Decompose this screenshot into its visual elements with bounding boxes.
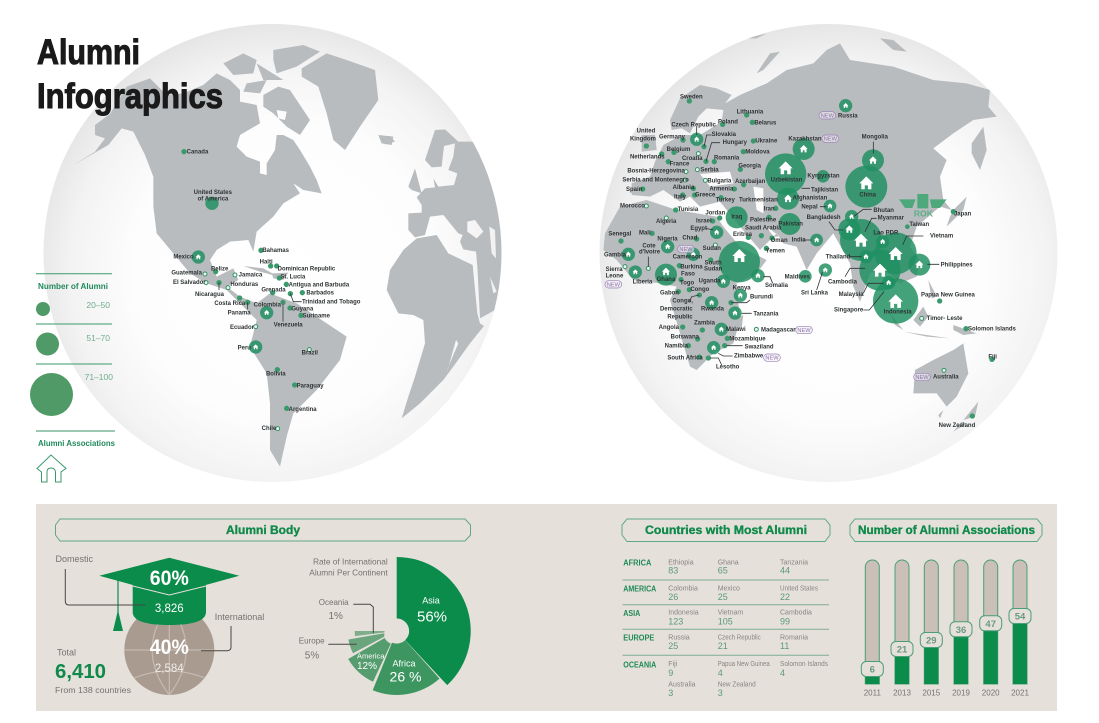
country labels: eurasia, africa, oceania: Zambia [694, 320, 716, 326]
label: International: International [215, 612, 264, 622]
country labels: eurasia, africa, oceania: Croatia [682, 156, 703, 162]
heading: Countries with Most Alumni [622, 519, 830, 542]
country labels: eurasia, africa, oceania: Maldives [785, 274, 811, 280]
bar: 2020: 47 [985, 619, 996, 630]
country labels: eurasia, africa, oceania: Tanzania [753, 311, 779, 317]
country labels: eurasia, africa, oceania: United [637, 129, 656, 135]
NEW badges: NEW [607, 282, 621, 288]
country labels: eurasia, africa, oceania: Greece [695, 193, 716, 199]
country labels: eurasia, africa, oceania: Senegal [608, 231, 632, 237]
legend: number of alumni and associations: 20–50 [86, 300, 110, 310]
label: International [201, 612, 264, 651]
row: Europe: 21 [718, 641, 728, 651]
country labels: americas: Brazil [302, 350, 318, 356]
row: Europe: Russia [668, 634, 690, 641]
country labels: americas: Argentina [289, 407, 317, 413]
row: Africa [623, 559, 808, 576]
NEW badges: NEW [821, 113, 835, 119]
row: America [623, 584, 818, 602]
bar: 2020: 2020 [982, 688, 1000, 697]
chart: number of alumni associations by year [861, 560, 1031, 697]
row: Oceania: OCEANIA [623, 660, 656, 669]
chart: graduation cap and globe: 60% [150, 567, 189, 590]
country labels: eurasia, africa, oceania: Israel [696, 218, 712, 224]
country labels: eurasia, africa, oceania: Australia [933, 375, 959, 381]
country labels: eurasia, africa, oceania: d'Ivoire [639, 249, 661, 255]
country labels: eurasia, africa, oceania: Egypt [690, 226, 707, 232]
country labels: americas: Colombia [254, 303, 282, 309]
country labels: eurasia, africa, oceania: Italy [674, 194, 687, 200]
bar: 2019 [950, 560, 972, 697]
country labels: eurasia, africa, oceania: Belarus [754, 120, 777, 126]
country labels: americas: Venezuela [274, 322, 303, 328]
country labels: eurasia, africa, oceania: Lithuania [737, 110, 764, 116]
legend: number of alumni and associations: 51–70 [86, 333, 110, 343]
country labels: eurasia, africa, oceania: Congo [690, 287, 710, 293]
bar: 2019: 36 [956, 625, 966, 636]
country labels: eurasia, africa, oceania: Romania [714, 156, 740, 162]
NEW badges: NEW [765, 356, 779, 362]
row: Africa: 44 [780, 566, 790, 576]
country labels: eurasia, africa, oceania: Kyrgyzstan [807, 174, 840, 180]
row: Asia: 123 [668, 617, 683, 627]
bar: 2011: 6 [870, 664, 875, 676]
country labels: eurasia, africa, oceania: Fiji [988, 354, 997, 360]
heading: Number of Alumni Associations [850, 519, 1042, 542]
bar: 2021 [1009, 560, 1031, 697]
bar: 2015: 2015 [922, 688, 941, 697]
NEW badges: NEW [915, 375, 929, 381]
row: Asia [623, 609, 812, 627]
country labels: eurasia, africa, oceania: Ghana [657, 277, 676, 283]
country labels: eurasia, africa, oceania: Serbia and Montenegro [622, 178, 689, 184]
row: Oceania: 3 [718, 688, 723, 698]
row: Oceania: 4 [780, 668, 785, 678]
chart: graduation cap and globe: 40% [150, 636, 189, 659]
row: Africa: Tanzania [780, 560, 808, 566]
country labels: eurasia, africa, oceania: Armenia [709, 187, 734, 193]
country labels: eurasia, africa, oceania: Myanmar [878, 216, 905, 222]
country labels: eurasia, africa, oceania: Kenya [733, 286, 751, 292]
country labels: eurasia, africa, oceania: Swaziland [745, 345, 774, 351]
row: Asia: Vietnam [718, 610, 743, 617]
country labels: eurasia, africa, oceania: Moldova [745, 149, 770, 155]
hollow association markers [623, 152, 946, 372]
NEW badges: NEW [797, 328, 811, 334]
chart: graduation cap and globe: 2,584 [155, 663, 184, 675]
country labels: eurasia, africa, oceania: Lesotho [716, 365, 740, 371]
title: Infographics [37, 76, 223, 116]
row: Europe: 11 [780, 641, 789, 651]
country labels: eurasia, africa, oceania: Poland [718, 119, 738, 125]
row: Europe: EUROPE [623, 634, 655, 643]
country labels: eurasia, africa, oceania: Ukraine [755, 138, 778, 144]
chart: rate of international alumni per continent: 12% [357, 661, 377, 672]
country labels: eurasia, africa, oceania: Uganda [699, 279, 721, 285]
country labels: americas: Canada [187, 149, 209, 155]
country labels: eurasia, africa, oceania: Netherlands [630, 155, 665, 161]
country labels: eurasia, africa, oceania: China [859, 193, 877, 199]
bar: 2021: 54 [1015, 612, 1026, 622]
chart: rate of international alumni per continent: 5% [305, 650, 319, 661]
country labels: eurasia, africa, oceania: Gabon [660, 290, 679, 296]
country labels: eurasia, africa, oceania: Rwanda [701, 306, 725, 312]
chart: rate of international alumni per continent: Europe [299, 637, 325, 646]
country labels: eurasia, africa, oceania: Liberia [633, 279, 653, 285]
logo: ROK: ROK [914, 208, 934, 218]
country labels: americas: Dominican Republic [278, 267, 336, 273]
country labels: eurasia, africa, oceania: Japan [954, 211, 972, 217]
country labels: eurasia, africa, oceania: Turkey [716, 198, 736, 204]
country labels: eurasia, africa, oceania: Burkina [680, 265, 703, 271]
total alumni: From 138 countries [55, 685, 131, 695]
bar: 2011: 2011 [864, 688, 881, 697]
country labels: eurasia, africa, oceania: Cote [642, 243, 656, 249]
chart: rate of international alumni per continent: Asia [422, 596, 440, 606]
chart: rate of international alumni per continent: America [357, 651, 385, 660]
country labels: eurasia, africa, oceania: Cameroon [673, 254, 703, 260]
country labels: americas: Panama [228, 310, 251, 316]
country labels: eurasia, africa, oceania: Serbia [700, 168, 719, 174]
bar: 2019: 2019 [952, 688, 970, 697]
row: Oceania: New Zealand [718, 682, 756, 689]
land masses: eurasia, africa, australia [603, 33, 997, 432]
country labels: americas: Grenada [261, 288, 286, 294]
row: Asia: 105 [718, 617, 733, 627]
country labels: americas [171, 149, 361, 432]
label: Domestic [56, 554, 145, 605]
country labels: americas: Honduras [230, 282, 259, 288]
country labels: eurasia, africa, oceania: Angola [659, 325, 680, 331]
row: Africa: AFRICA [623, 559, 652, 568]
row: Europe: Czech Republic [718, 634, 761, 641]
title: Alumni [37, 32, 140, 72]
country labels: eurasia, africa, oceania: Kingdom [630, 137, 656, 143]
row: Asia: 99 [780, 617, 790, 627]
row: Africa: Ghana [718, 560, 739, 566]
country labels: americas: Haiti [260, 259, 273, 265]
country labels: americas: Trinidad and Tobago [302, 300, 361, 306]
legend: number of alumni and associations: Alumni Associations [38, 439, 115, 448]
country labels: eurasia, africa, oceania: Malawi [726, 327, 746, 333]
country labels: eurasia, africa, oceania: Sierra [606, 267, 623, 273]
country labels: eurasia, africa, oceania: South Africa [667, 356, 703, 362]
house icons [626, 103, 923, 350]
country labels: americas: St. Lucia [280, 274, 306, 280]
legend: number of alumni and associations: 71–100 [85, 372, 113, 382]
country labels: americas: Nicaragua [195, 292, 225, 298]
country labels: eurasia, africa, oceania: Nigeria [657, 237, 678, 243]
chart: rate of international alumni per continent: 26 % [390, 669, 421, 685]
chart: rate of international alumni per continent: 1% [328, 611, 343, 622]
bar: 2021: 2021 [1011, 688, 1029, 697]
country labels: eurasia, africa, oceania: Eritrea [733, 232, 753, 238]
chart: rate of international alumni per continent: 56% [417, 609, 447, 626]
country labels: eurasia, africa, oceania: Botswana [671, 334, 700, 340]
country labels: eurasia, africa, oceania: Burundi [750, 295, 773, 301]
country labels: americas: Belize [211, 266, 229, 272]
row: America: Colombia [668, 585, 698, 592]
country labels: eurasia, africa, oceania: Sudan [703, 246, 721, 252]
chart: graduation cap and globe: 3,826 [155, 603, 184, 615]
country labels: eurasia, africa, oceania: France [670, 162, 690, 168]
country labels: americas: Antigua and Barbuda [289, 282, 350, 288]
country labels: eurasia, africa, oceania: Indonesia [884, 310, 912, 316]
country labels: americas: Costa Rica [214, 301, 246, 307]
country labels: eurasia, africa, oceania: Togo [680, 280, 695, 286]
country labels: eurasia, africa, oceania: Vietnam [930, 233, 953, 239]
legend: number of alumni and associations: Number of Alumni [38, 282, 108, 291]
logo: ROK [899, 194, 947, 218]
country labels: eurasia, africa, oceania: Jordan [705, 211, 726, 217]
row: America: 26 [668, 592, 678, 602]
country labels: americas: Paraguay [297, 383, 324, 389]
country labels: eurasia, africa, oceania: Uzbekistan [771, 178, 803, 184]
total alumni: 6,410 [55, 660, 106, 683]
row: America: United States [780, 585, 818, 592]
country labels: eurasia, africa, oceania: Singapore [834, 307, 864, 313]
country labels: eurasia, africa, oceania: Leone [606, 273, 624, 279]
country labels: americas: Barbados [306, 291, 335, 297]
country labels: eurasia, africa, oceania: Democratic [660, 307, 693, 313]
country labels: americas: Suriname [303, 314, 331, 320]
row: Oceania: 9 [668, 668, 673, 678]
country labels: eurasia, africa, oceania: Sweden [680, 95, 703, 101]
country labels: eurasia, africa, oceania: Oman [771, 238, 788, 244]
country labels: americas: El Salvador [173, 280, 206, 286]
country labels: eurasia, africa, oceania: Slovakia [712, 132, 737, 138]
country labels: eurasia, africa, oceania: Russia [838, 114, 858, 120]
country labels: americas: Bahamas [262, 248, 290, 254]
country labels: americas: Guyana [291, 307, 314, 313]
heading: Number of Alumni Associations: Number of Alumni Associations [858, 523, 1035, 537]
country labels: eurasia, africa, oceania: Turkmenistan [739, 197, 778, 203]
total alumni: Total [57, 648, 76, 658]
country labels: eurasia, africa, oceania: Cambodia [828, 280, 858, 286]
country labels: eurasia, africa, oceania: Nepal [801, 205, 818, 211]
country labels: eurasia, africa, oceania: Morocco [620, 203, 645, 209]
row: Europe: 25 [668, 641, 678, 651]
country labels: eurasia, africa, oceania: Kazakhstan [788, 136, 822, 142]
country labels: eurasia, africa, oceania: Faso [681, 271, 695, 277]
country labels: eurasia, africa, oceania: New Zealand [939, 423, 976, 429]
country labels: eurasia, africa, oceania: Bangladesh [807, 215, 841, 221]
country labels: eurasia, africa, oceania: Mali [639, 231, 651, 237]
country labels: eurasia, africa, oceania: Chad [682, 236, 698, 242]
country labels: eurasia, africa, oceania: Pakistan [778, 222, 803, 228]
country labels: americas: Chile [262, 426, 277, 432]
chart: rate of international alumni per continent: Africa [392, 659, 416, 669]
heading: Countries with Most Alumni: Countries with Most Alumni [645, 523, 807, 537]
table: countries with most alumni [622, 559, 829, 698]
NEW badges: NEW [679, 247, 693, 253]
land masses: americas, greenland, europe, africa [73, 45, 504, 467]
country labels: eurasia, africa, oceania: Iraq [731, 215, 743, 221]
chart: rate of international alumni per continent: Oceania [319, 598, 349, 607]
heading: Alumni Body: Alumni Body [226, 523, 300, 537]
icon: house outline [37, 455, 66, 482]
bar: 2015: 29 [926, 636, 937, 646]
country labels: eurasia, africa, oceania: Congo, [672, 298, 693, 304]
country labels: eurasia, africa, oceania: Germany [659, 134, 686, 140]
country labels: americas: Mexico [173, 254, 194, 260]
country labels: eurasia, africa, oceania: Timor- Leste [927, 316, 963, 322]
country labels: eurasia, africa, oceania: Somalia [765, 283, 789, 289]
country labels: eurasia, africa, oceania: Yemen [766, 248, 785, 254]
bar: 2015 [920, 560, 942, 697]
country labels: eurasia, africa, oceania: Bulgaria [707, 178, 732, 184]
row: Asia: Indonesia [668, 610, 699, 617]
country labels: eurasia, africa, oceania: Solomon Islands [968, 327, 1017, 333]
country labels: eurasia, africa, oceania: Saudi Arabia [745, 226, 782, 232]
country labels: eurasia, africa, oceania: Azerbaijan [735, 179, 766, 185]
label: Domestic: Domestic [56, 554, 94, 564]
alumni bubbles [618, 98, 995, 419]
title [37, 32, 223, 116]
row: America: 22 [780, 592, 790, 602]
country labels: eurasia, africa, oceania: India [792, 238, 806, 244]
row: Oceania: Papua New Guinea [718, 661, 770, 668]
country labels: americas: United States [194, 190, 233, 196]
bar: 2011 [861, 560, 883, 697]
country labels: americas: Jamaica [239, 272, 263, 278]
row: Africa: 65 [718, 566, 728, 576]
country labels: eurasia, africa, oceania: Thailand [826, 255, 851, 261]
country labels: eurasia, africa, oceania: Malaysia [839, 292, 864, 298]
row: America: 25 [718, 592, 728, 602]
country labels: eurasia, africa, oceania: Gambia [604, 252, 627, 258]
bar: 2013: 21 [897, 644, 908, 656]
row: Asia: ASIA [623, 609, 640, 618]
bar: 2013: 2013 [893, 688, 911, 697]
country labels: eurasia, africa, oceania: Bosnia-Herzegovina [627, 169, 686, 175]
small alumni dots [618, 98, 995, 419]
country labels: americas: of America [198, 197, 229, 203]
NEW badges [605, 112, 930, 381]
country labels: americas: Bolivia [266, 371, 286, 377]
globe: americas [44, 24, 504, 482]
country labels: eurasia, africa, oceania: Mozambique [729, 336, 766, 342]
leader lines [648, 127, 939, 365]
country labels: eurasia, africa, oceania: Sri Lanka [801, 291, 829, 297]
country labels: eurasia, africa, oceania: Albania [673, 185, 695, 191]
chart: graduation cap and globe [99, 558, 239, 695]
country labels: eurasia, africa, oceania: Madagascar [761, 328, 796, 334]
bottom panel [36, 504, 1057, 711]
row: America: AMERICA [623, 584, 656, 593]
country labels: eurasia, africa, oceania: Namibia [665, 343, 689, 349]
row: Oceania [623, 660, 828, 698]
country labels: eurasia, africa, oceania: Palestine [750, 217, 777, 223]
country labels: eurasia, africa, oceania [604, 95, 1017, 429]
row: Oceania: 4 [718, 668, 723, 678]
country labels: americas: Ecuador [230, 325, 255, 331]
country labels: americas: Guatemala [171, 270, 203, 276]
country labels: americas: Peru [238, 346, 251, 352]
country labels: eurasia, africa, oceania: Mongolia [862, 135, 889, 141]
country labels: eurasia, africa, oceania: Bhutan [873, 208, 894, 214]
country labels: eurasia, africa, oceania: Belgium [667, 147, 690, 153]
row: Oceania: Australia [668, 682, 696, 689]
country labels: eurasia, africa, oceania: Czech Republic [671, 122, 717, 128]
country labels: eurasia, africa, oceania: Hungary [723, 140, 748, 146]
chart: rate of international alumni per continent [299, 556, 471, 695]
country labels: eurasia, africa, oceania: Iran [764, 207, 775, 213]
row: America: Mexico [718, 585, 740, 592]
country labels: eurasia, africa, oceania: Lao PDR [873, 231, 899, 237]
row: Europe: Romania [780, 634, 808, 641]
row: Africa: 83 [668, 566, 678, 576]
country labels: eurasia, africa, oceania: Tajikistan [811, 187, 839, 193]
country labels: eurasia, africa, oceania: Spain [626, 187, 643, 193]
country labels: eurasia, africa, oceania: Afghanistan [793, 195, 828, 201]
row: Europe [623, 634, 808, 651]
row: Oceania: Solomon Islands [780, 661, 828, 668]
country labels: eurasia, africa, oceania: Republic [667, 315, 693, 321]
country labels: eurasia, africa, oceania: Georgia [738, 164, 762, 170]
country labels: eurasia, africa, oceania: Sudan [704, 267, 723, 273]
country labels: eurasia, africa, oceania: South [705, 260, 722, 266]
bar: 2013 [891, 560, 913, 697]
country labels: eurasia, africa, oceania: Taiwan [909, 222, 930, 228]
country labels: eurasia, africa, oceania: Philippines [941, 262, 973, 268]
row: Africa: Ethiopia [668, 560, 694, 566]
country labels: eurasia, africa, oceania: Algeria [656, 219, 677, 225]
NEW badges: NEW [824, 137, 838, 143]
row: Asia: Cambodia [780, 610, 812, 617]
row: Oceania: 3 [668, 688, 673, 698]
bar: 2020 [980, 560, 1002, 697]
chart: rate of international alumni per continent: Alumni Per Continent [309, 568, 388, 578]
globe: eurasia, africa, oceania [600, 24, 1058, 482]
country labels: eurasia, africa, oceania: Zimbabwe [734, 354, 764, 360]
row: Oceania: Fiji [668, 661, 678, 668]
country labels: eurasia, africa, oceania: Tunisia [678, 207, 699, 213]
chart: rate of international alumni per continent: Rate of International [313, 556, 388, 566]
total alumni [55, 648, 131, 695]
legend: number of alumni and associations [30, 274, 115, 482]
heading: Alumni Body [56, 519, 470, 541]
alumni markers: americas [181, 149, 311, 431]
country labels: eurasia, africa, oceania: Papua New Guinea [921, 292, 976, 298]
